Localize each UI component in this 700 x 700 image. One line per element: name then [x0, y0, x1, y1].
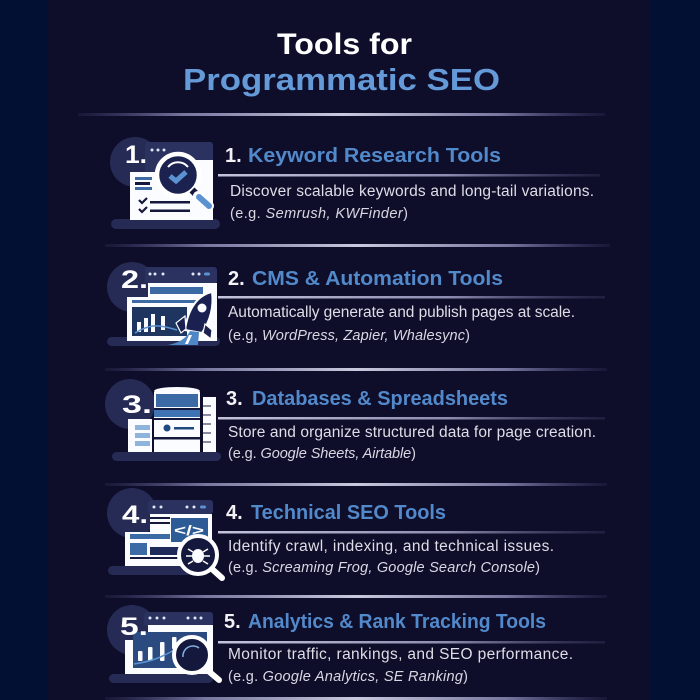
row 5: analytics and rank tracking tools: [107, 605, 605, 685]
examples: (e.g. Screaming Frog, Google Search Console): [228, 560, 540, 576]
examples: (e.g. Google Analytics, SE Ranking): [228, 669, 468, 685]
heading: CMS & Automation Tools: [252, 268, 503, 290]
heading: Databases & Spreadsheets: [252, 388, 508, 410]
heading: 3.: [226, 388, 243, 410]
description: Monitor traffic, rankings, and SEO performance.: [228, 646, 573, 663]
icon: database stack and spreadsheets: [105, 379, 221, 461]
icon: analytics chart with magnifier: 5.: [120, 613, 148, 641]
heading: 4.: [226, 502, 243, 524]
row 2: CMS and automation tools: [107, 262, 605, 346]
heading: Analytics & Rank Tracking Tools: [248, 611, 546, 633]
row 3: databases and spreadsheets: [105, 379, 605, 462]
heading: 1.: [225, 145, 242, 167]
icon: code window with bug magnifier: </>: [174, 522, 204, 538]
heading: Technical SEO Tools: [251, 502, 446, 524]
row 1: keyword research tools: [110, 137, 600, 229]
title: Programmatic SEO: [183, 62, 500, 97]
description: Automatically generate and publish pages at scale.: [228, 304, 575, 321]
icon: browser window with rocket: [107, 262, 220, 346]
row 4: technical SEO tools: [107, 488, 605, 578]
heading: 5.: [224, 611, 241, 633]
description: Identify crawl, indexing, and technical issues.: [228, 538, 554, 555]
icon: database stack and spreadsheets: 3.: [122, 391, 152, 419]
description: Discover scalable keywords and long-tail variations.: [230, 183, 594, 200]
examples: (e.g. Google Sheets, Airtable): [228, 446, 416, 462]
heading: Keyword Research Tools: [248, 145, 501, 167]
title: Tools for: [277, 28, 412, 61]
examples: (e.g, WordPress, Zapier, Whalesync): [228, 328, 470, 344]
heading: 2.: [228, 268, 245, 290]
icon: code window with bug magnifier: 4.: [122, 501, 148, 529]
icon: keyword research document with magnifier: 1.: [125, 141, 147, 169]
description: Store and organize structured data for page creation.: [228, 424, 596, 441]
icon: analytics chart with magnifier: [107, 605, 219, 683]
title: [183, 28, 500, 97]
examples: (e.g. Semrush, KWFinder): [230, 206, 408, 222]
icon: code window with bug magnifier: [107, 488, 222, 578]
icon: browser window with rocket: 2.: [121, 266, 148, 294]
icon: keyword research document with magnifier: [110, 137, 220, 229]
